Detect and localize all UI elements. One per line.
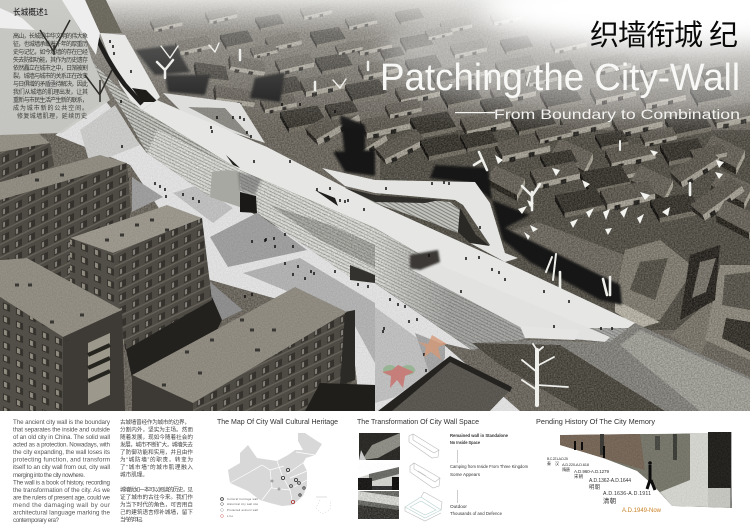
- panel text: 我们从城墙的肌理出发，让其: [13, 88, 88, 96]
- map legend: [221, 497, 259, 518]
- lower deck: [412, 263, 610, 342]
- history timeline labels: A.D.960-A.D.1279: [574, 469, 609, 474]
- panel text: 裂，城墙与城市的关系正在改变: [13, 72, 88, 80]
- curving wing: [163, 93, 265, 143]
- building: far left: [0, 132, 58, 205]
- south sea inset: [316, 497, 331, 514]
- history timeline labels: A.D.1362-A.D.1644: [589, 478, 631, 484]
- roof equipment: [15, 175, 276, 385]
- English description: itself to an city wall from out, city wall: [13, 464, 110, 471]
- transformation notes: Camping from Inside From Three Kingdom: [450, 464, 528, 469]
- city wall: [85, 0, 635, 350]
- map legend: Protected ancient wall: [227, 508, 258, 512]
- Chinese description: 城市肌理。: [120, 470, 148, 478]
- white lower band: [0, 411, 750, 528]
- English description: mend the damaging wall by our: [13, 502, 110, 509]
- heritage markers: [271, 468, 305, 504]
- panel text: 失去防御功能，其作为历史遗存: [13, 56, 88, 64]
- panel text: 征，也城墙承载着千年的厚重历: [13, 40, 88, 48]
- transformation notes: [450, 433, 528, 516]
- subtitle with rule: From Boundary to Combination: [494, 106, 740, 122]
- Chinese description: 城墙犹如一本可以阅读的历史，见: [120, 486, 193, 494]
- map legend: Historical city wall site: [227, 502, 259, 506]
- map of China: [221, 433, 331, 518]
- photo: ruined wall: [359, 433, 400, 460]
- map legend: Cultural heritage wall: [227, 497, 258, 501]
- transformation photos: [358, 433, 400, 519]
- history timeline labels: 宋朝: [574, 473, 584, 480]
- transformation notes: Some Appears: [450, 472, 480, 477]
- main heading: Chinese title: 织墙衔城 纪: [590, 19, 738, 52]
- Chinese description: 证了城市的古往今来。我们作: [120, 493, 193, 501]
- section heading: map: The Map Of City Wall Cultural Heritage: [217, 417, 338, 426]
- section heading: history: Pending History Of The City Memory: [536, 417, 655, 426]
- aerial perspective image: [0, 0, 750, 411]
- panel text: 依然矗立在城市之中，日渐被割: [13, 64, 88, 72]
- white birds: [495, 150, 724, 240]
- history timeline labels: A.D.1949-Now: [622, 508, 662, 514]
- left intro panel: [0, 0, 112, 135]
- building: centre: [70, 205, 222, 378]
- silhouettes: [575, 441, 604, 458]
- Chinese description: 当今的印记。: [120, 516, 146, 524]
- English description: architectural language marking the: [13, 510, 111, 516]
- main deck: [142, 100, 635, 328]
- panel text: 成为城市新的公共空间。: [13, 104, 88, 112]
- building: lower right: [378, 356, 512, 411]
- isometric wall diagrams: [405, 434, 442, 521]
- Chinese description: 分割内外，坚实为主场。然而: [120, 426, 193, 434]
- English description: The wall is a book of history, recording: [13, 479, 111, 486]
- Chinese description: 己的建筑语言修补城墙，留下: [120, 508, 193, 516]
- panel text: 史与记忆，如今城墙的存在已经: [13, 48, 88, 56]
- dark tree behind text: [40, 20, 112, 102]
- English description: of an old city in China. The solid wall: [13, 434, 110, 441]
- English description: merging into the city nowhere.: [13, 472, 85, 479]
- English description: the city expanding, the wall loses its: [13, 449, 110, 456]
- English description: that separates the inside and outside: [13, 426, 111, 434]
- figures: [110, 40, 612, 372]
- panel text: 修复城墙肌理，延续历史: [17, 112, 87, 120]
- panel heading: 长城概述1: [13, 7, 48, 17]
- history timeline labels: 清朝: [603, 496, 616, 505]
- wall upper stone strip: [85, 0, 122, 33]
- old city rooftops: [0, 0, 750, 411]
- Chinese description: 发展，城市不断扩大，城墙失去: [120, 440, 193, 448]
- panel text: [13, 32, 88, 120]
- darker steps: [375, 228, 635, 350]
- section heading: transformation: The Transformation Of City Wall Space: [357, 417, 479, 426]
- Chinese description: 了防御功能和实用，并且由作: [120, 448, 193, 456]
- dark patch on deck: [410, 250, 440, 270]
- transformation notes: No Inside Space: [450, 440, 481, 445]
- English description: acted as a protection. Nowadays, with: [13, 442, 111, 449]
- panel text: 高山，长城是中华文明的伟大象: [13, 32, 88, 40]
- history timeline labels: 明朝: [589, 484, 600, 491]
- bare white tree on old wall: [522, 344, 568, 405]
- left stone slope: [90, 60, 240, 207]
- photo: stepped ruin: [358, 491, 399, 519]
- building: bottom left: [0, 258, 125, 411]
- history timeline labels: B.C.221-A.D.25: [547, 457, 568, 461]
- panel text: 与日俱增的矛盾亟待解决，因此: [13, 80, 88, 88]
- English description: protecting function, and transform: [13, 457, 110, 464]
- Chinese description: 为当下时代的角色，可否用自: [120, 500, 193, 508]
- transformation notes: Remained wall in Standalone: [450, 433, 509, 438]
- canal shadow: [135, 45, 622, 305]
- white trees: [157, 43, 690, 295]
- English description: contemporary era?: [13, 517, 60, 524]
- photo: gate: [358, 463, 399, 490]
- history timeline labels: 隋唐: [562, 466, 570, 473]
- English description: [13, 419, 111, 524]
- building: bottom centre: [132, 287, 375, 411]
- flower sculptures: [382, 335, 447, 388]
- Chinese description: 了“城市墙”的城市肌理融入: [120, 463, 193, 471]
- history timeline labels: [547, 457, 662, 514]
- city wall memory photo: [560, 432, 732, 508]
- main stone slope and stepped wall: [147, 130, 635, 350]
- top fade: [0, 0, 750, 130]
- speckled stones: [270, 205, 375, 268]
- Chinese description: 随着发展，现如今随着社会的: [120, 433, 193, 441]
- history timeline labels: 秦汉: [547, 460, 559, 466]
- Chinese description: 为“城防墙”的职责，转变为: [120, 456, 193, 464]
- Chinese description: 古城墙曾经作为城市的边界，: [120, 418, 190, 426]
- English description: the transformation of the city. As we: [13, 487, 111, 494]
- Chinese description: [120, 418, 193, 524]
- transformation notes: Outdoor: [450, 504, 468, 509]
- building: left middle: [0, 155, 131, 300]
- history timeline labels: A.D.1636-A.D.1911: [603, 491, 651, 497]
- English description: The ancient city wall is the boundary: [13, 419, 111, 426]
- upper walkway: [100, 33, 160, 110]
- panel text: 重新与市民生活产生新的联系，: [13, 96, 88, 104]
- ground plaza: [55, 100, 568, 411]
- apartment buildings: [0, 132, 512, 411]
- main heading: English title: Patching the City-Wall: [380, 57, 740, 99]
- branch deck: [322, 168, 518, 262]
- map legend: site: [227, 514, 234, 518]
- English description: are the rulers of present age, could we: [13, 494, 111, 501]
- history timeline labels: A.D.220-A.D.618: [562, 462, 590, 467]
- old city wall with bricks: [472, 323, 750, 411]
- transformation notes: Thousands of and Defence: [450, 511, 503, 516]
